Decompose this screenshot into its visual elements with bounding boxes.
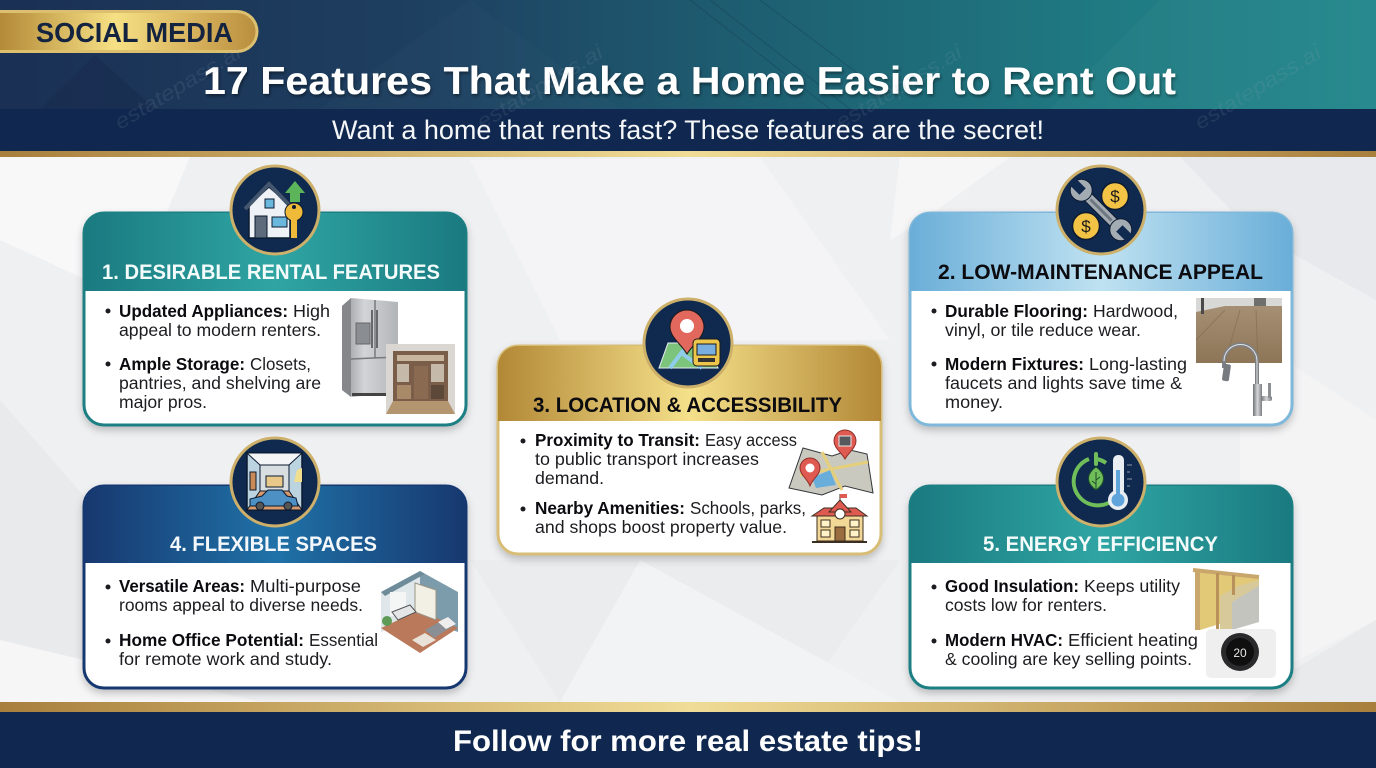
subtitle: Want a home that rents fast? These features are the secret! xyxy=(332,115,1044,145)
panel 1: desirable rental features xyxy=(84,213,466,425)
bullet list: Ample Storage: xyxy=(119,354,245,374)
bullet list xyxy=(520,430,806,537)
title: 17 Features That Make a Home Easier to Rent Out xyxy=(203,60,1176,103)
image: smart thermostat xyxy=(1206,629,1276,678)
heading: 5. ENERGY EFFICIENCY xyxy=(983,532,1218,556)
bullet list: faucets and lights save time & xyxy=(945,373,1182,393)
image: folded map with pins xyxy=(789,430,873,495)
social media badge: SOCIAL MEDIA xyxy=(36,17,233,48)
panel 4: flexible spaces xyxy=(84,486,466,688)
bullet list: Modern HVAC: xyxy=(945,630,1063,650)
subtitle band xyxy=(0,109,1376,151)
bullet list xyxy=(932,301,1187,412)
panel 2: low-maintenance appeal xyxy=(910,213,1292,425)
image: walk-in closet xyxy=(386,344,455,414)
icon badge: house with key and arrow xyxy=(231,166,319,254)
bullet list: to public transport increases xyxy=(535,449,759,469)
bullet list: Keeps utility xyxy=(1084,576,1180,596)
watermark row: estatepass.ai xyxy=(111,40,246,134)
heading: 4. FLEXIBLE SPACES xyxy=(170,532,377,556)
bullet list: pantries, and shelving are xyxy=(119,373,321,393)
icon badge: leaf and thermometer xyxy=(1057,438,1145,526)
image: refrigerator xyxy=(342,298,398,397)
watermark row: estatepass.ai xyxy=(1191,40,1326,134)
image: smart thermostat: 20 xyxy=(1233,646,1247,660)
bullet list: money. xyxy=(945,392,1003,412)
bullet list: Multi-purpose xyxy=(250,576,361,596)
bullet list: for remote work and study. xyxy=(119,649,332,669)
bullet list xyxy=(932,576,1198,669)
icon badge: wrench and coins: $ xyxy=(1081,217,1091,236)
bullet list: rooms appeal to diverse needs. xyxy=(119,595,363,615)
watermark row: estatepass.ai xyxy=(473,40,608,134)
bullet list: & cooling are key selling points. xyxy=(945,649,1192,669)
icon badge: garage room with car xyxy=(231,438,319,526)
bullet list: Closets, xyxy=(250,354,311,374)
watermark row xyxy=(111,40,1326,134)
social media badge xyxy=(0,10,258,53)
bullet list: costs low for renters. xyxy=(945,595,1107,615)
icon badge: wrench and coins xyxy=(1057,166,1145,254)
heading: 3. LOCATION & ACCESSIBILITY xyxy=(533,393,842,417)
bullet list: and shops boost property value. xyxy=(535,517,787,537)
bullet list: Durable Flooring: xyxy=(945,301,1088,321)
image: school building xyxy=(812,494,867,543)
panel 5: energy efficiency xyxy=(910,486,1292,688)
heading: 2. LOW-MAINTENANCE APPEAL xyxy=(938,260,1263,284)
bullet list: Long-lasting xyxy=(1089,354,1187,374)
bullet list: appeal to modern renters. xyxy=(119,320,321,340)
bullet list: Proximity to Transit: xyxy=(535,430,700,450)
bullet list xyxy=(106,301,330,412)
heading: 1. DESIRABLE RENTAL FEATURES xyxy=(102,260,440,284)
panel 3: location and accessibility xyxy=(498,346,881,554)
image: chrome faucet xyxy=(1222,344,1272,416)
watermark row: estatepass.ai xyxy=(832,40,967,134)
image: isometric room xyxy=(381,571,458,653)
image: wood flooring xyxy=(1196,298,1282,363)
bullet list: High xyxy=(293,301,330,321)
footer call to action: Follow for more real estate tips! xyxy=(453,725,923,758)
bullet list xyxy=(106,576,378,669)
bullet list: demand. xyxy=(535,468,604,488)
bullet list: Easy access xyxy=(705,430,797,450)
footer band xyxy=(0,712,1376,768)
bullet list: major pros. xyxy=(119,392,207,412)
bullet list: Nearby Amenities: xyxy=(535,498,685,518)
bullet list: Schools, parks, xyxy=(690,498,806,518)
gold rule below header xyxy=(0,151,1376,157)
bullet list: vinyl, or tile reduce wear. xyxy=(945,320,1141,340)
icon badge: wrench and coins: $ xyxy=(1110,187,1120,206)
image: wall insulation layers xyxy=(1193,570,1259,630)
bullet list: Home Office Potential: xyxy=(119,630,304,650)
bullet list: Hardwood, xyxy=(1093,301,1178,321)
bullet list: Modern Fixtures: xyxy=(945,354,1084,374)
header banner xyxy=(0,0,1376,110)
gold rule above footer xyxy=(0,702,1376,712)
bullet list: Efficient heating xyxy=(1068,630,1198,650)
icon badge: map pin and bus xyxy=(644,299,732,387)
bullet list: Updated Appliances: xyxy=(119,301,288,321)
bullet list: Good Insulation: xyxy=(945,576,1079,596)
bullet list: Versatile Areas: xyxy=(119,576,245,596)
bullet list: Essential xyxy=(309,630,378,650)
